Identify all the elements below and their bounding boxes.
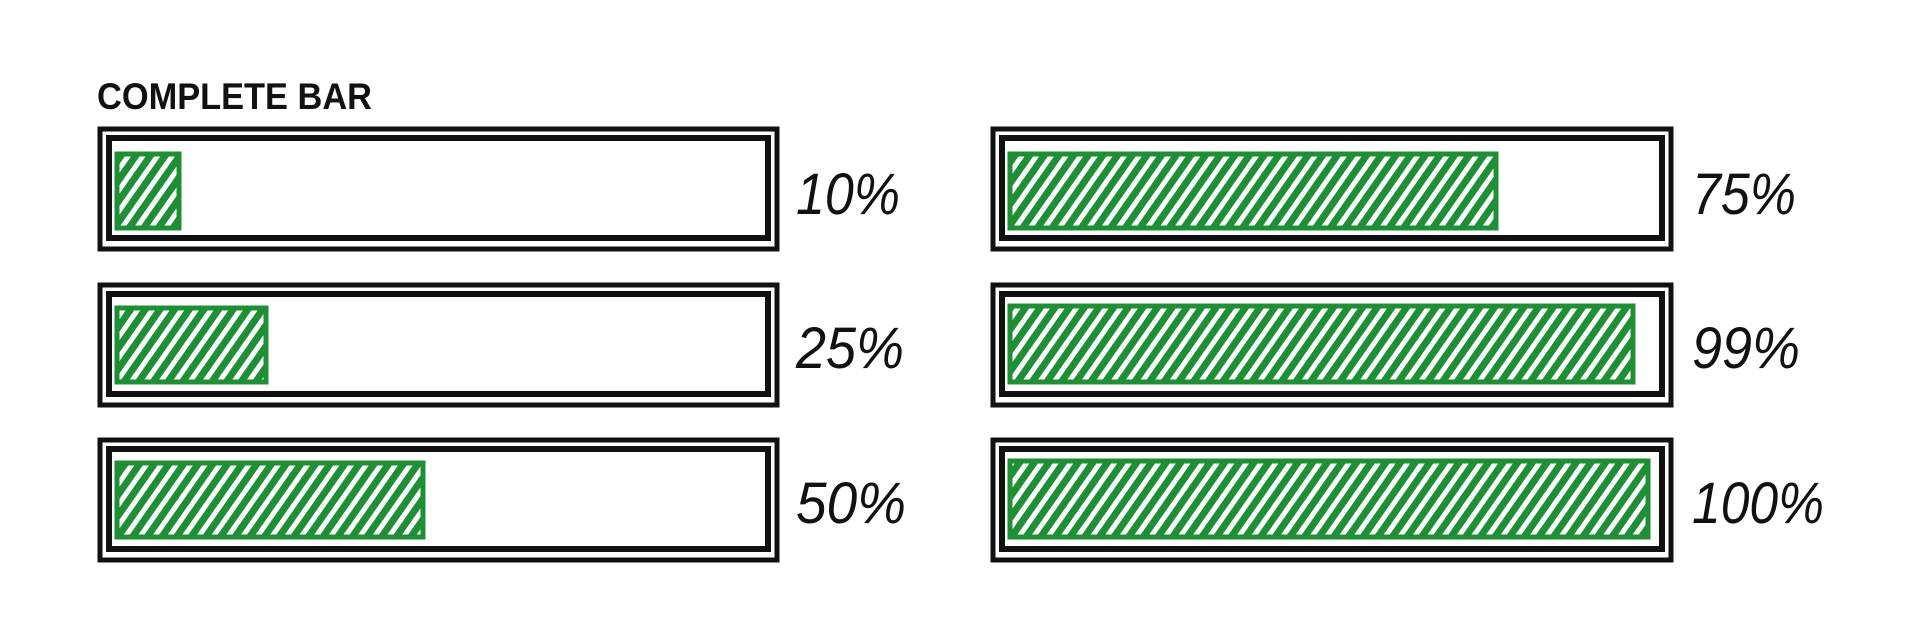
bar: 100%: 100%	[1692, 471, 1824, 536]
bar: 99%: 99%	[1692, 316, 1800, 381]
bar: 25%: 25%	[795, 316, 904, 381]
bar: 10%: 10%	[796, 162, 900, 227]
bar: 50%	[100, 440, 906, 560]
bar: 25%	[100, 285, 904, 405]
bar: 100%	[993, 440, 1824, 560]
bar: 10%	[100, 129, 900, 249]
title: COMPLETE BAR	[97, 76, 372, 117]
bar: 50%: 50%	[796, 471, 906, 536]
bar: 99%	[993, 285, 1800, 405]
bar: 75%	[993, 129, 1796, 249]
bar: 75%: 75%	[1692, 162, 1796, 227]
